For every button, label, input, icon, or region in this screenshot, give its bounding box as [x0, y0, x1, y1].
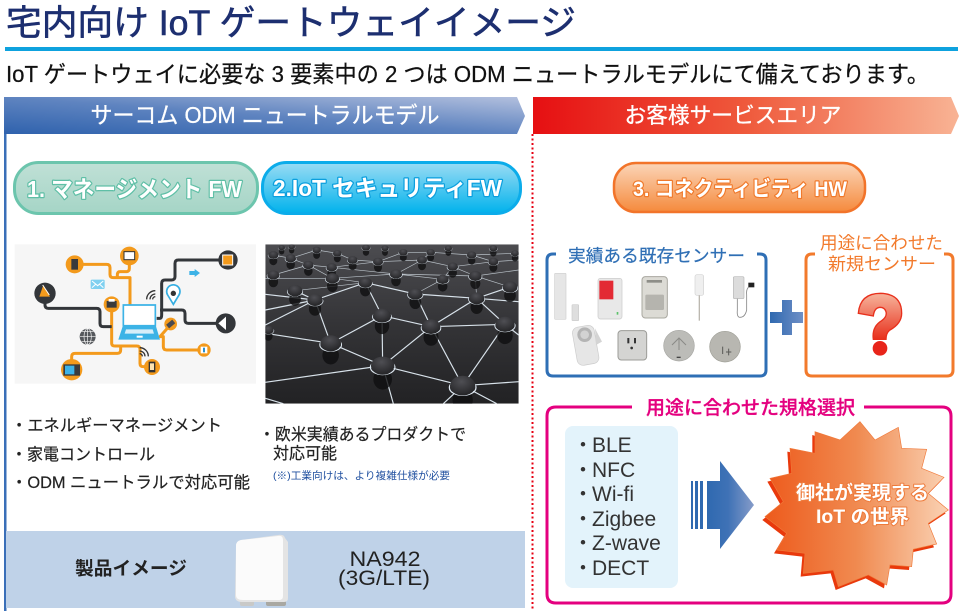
feature list: management FW: ・ODM ニュートラルで対応可能	[11, 473, 250, 492]
list: wireless standards: ・	[572, 434, 594, 457]
list: wireless standards: NFC	[592, 459, 635, 482]
list: wireless standards: ・	[572, 557, 594, 580]
list: wireless standards: ・	[572, 508, 594, 531]
arrow	[691, 461, 754, 549]
footnote: (※)工業向けは、より複雑仕様が必要	[273, 469, 450, 482]
title underline	[5, 47, 958, 51]
title: 宅内向け IoT ゲートウェイイメージ	[6, 4, 576, 43]
starburst: your IoT world: IoT の世界	[816, 506, 909, 528]
panel left border	[4, 97, 6, 611]
feature list: security FW: ・欧米実績あるプロダクトで	[259, 425, 466, 444]
icon: gateway device	[235, 535, 288, 606]
header arrow: Sercomm ODM neutral model: サーコム ODM ニュートラルモデル	[90, 102, 440, 128]
box: new sensors: 用途に合わせた	[820, 233, 943, 253]
label: product image: 製品イメージ	[75, 558, 187, 579]
feature list: security FW	[259, 425, 466, 482]
feature list: management FW: ・家電コントロール	[11, 445, 155, 464]
pill: 3. connectivity HW: 3. コネクティビティ HW	[633, 178, 847, 201]
panel: Sercomm ODM neutral model	[4, 97, 525, 611]
list: wireless standards: ・	[572, 532, 594, 555]
starburst: your IoT world	[762, 422, 948, 590]
list: wireless standards: ・	[572, 459, 594, 482]
header arrow: customer service area	[533, 97, 959, 134]
image: dark mesh network photo	[263, 244, 519, 412]
red dotted divider	[532, 134, 534, 611]
list: wireless standards: DECT	[592, 557, 649, 580]
laptop	[118, 305, 160, 340]
pill: 1. management FW	[14, 162, 258, 214]
box: standard selection: 用途に合わせた規格選択	[646, 397, 855, 419]
list: wireless standards	[565, 426, 678, 588]
pill: 2. IoT security FW	[262, 162, 520, 214]
model name	[338, 548, 430, 590]
box: existing sensors: 実績ある既存センサー	[568, 246, 745, 266]
header arrow: Sercomm ODM neutral model	[4, 97, 525, 134]
node icons	[34, 247, 238, 380]
header arrow: customer service area: お客様サービスエリア	[624, 103, 842, 128]
list: wireless standards: BLE	[592, 434, 632, 457]
subtitle: IoT ゲートウェイに必要な 3 要素中の 2 つは ODM ニュートラルモデルにて備えております。	[6, 61, 929, 87]
list: wireless standards: Zigbee	[592, 508, 656, 531]
box: new sensors	[806, 233, 953, 376]
product image band	[6, 531, 525, 608]
feature list: management FW: ・エネルギーマネージメント	[11, 416, 222, 435]
pill: 2. IoT security FW: 2.IoT セキュリティFW	[273, 175, 502, 201]
box: standard selection	[547, 397, 951, 603]
icon: plus	[770, 300, 803, 335]
icon: question mark	[858, 293, 902, 356]
image: device network diagram	[15, 244, 256, 384]
list: wireless standards: ・	[572, 483, 594, 506]
sensor products	[555, 273, 754, 366]
feature list: security FW: 対応可能	[273, 444, 337, 463]
box: new sensors: 新規センサー	[828, 254, 936, 274]
box: existing sensors	[547, 246, 766, 376]
feature list: management FW	[11, 416, 250, 492]
pill: 3. connectivity HW	[614, 163, 865, 212]
starburst: your IoT world: 御社が実現する	[796, 481, 929, 504]
list: wireless standards: Z-wave	[592, 532, 661, 555]
model name: NA942	[350, 548, 420, 571]
panel: customer service area	[533, 97, 959, 603]
pill: 1. management FW: 1. マネージメント FW	[27, 176, 242, 202]
model name: (3G/LTE)	[338, 567, 430, 590]
list: wireless standards: Wi-fi	[592, 483, 634, 506]
